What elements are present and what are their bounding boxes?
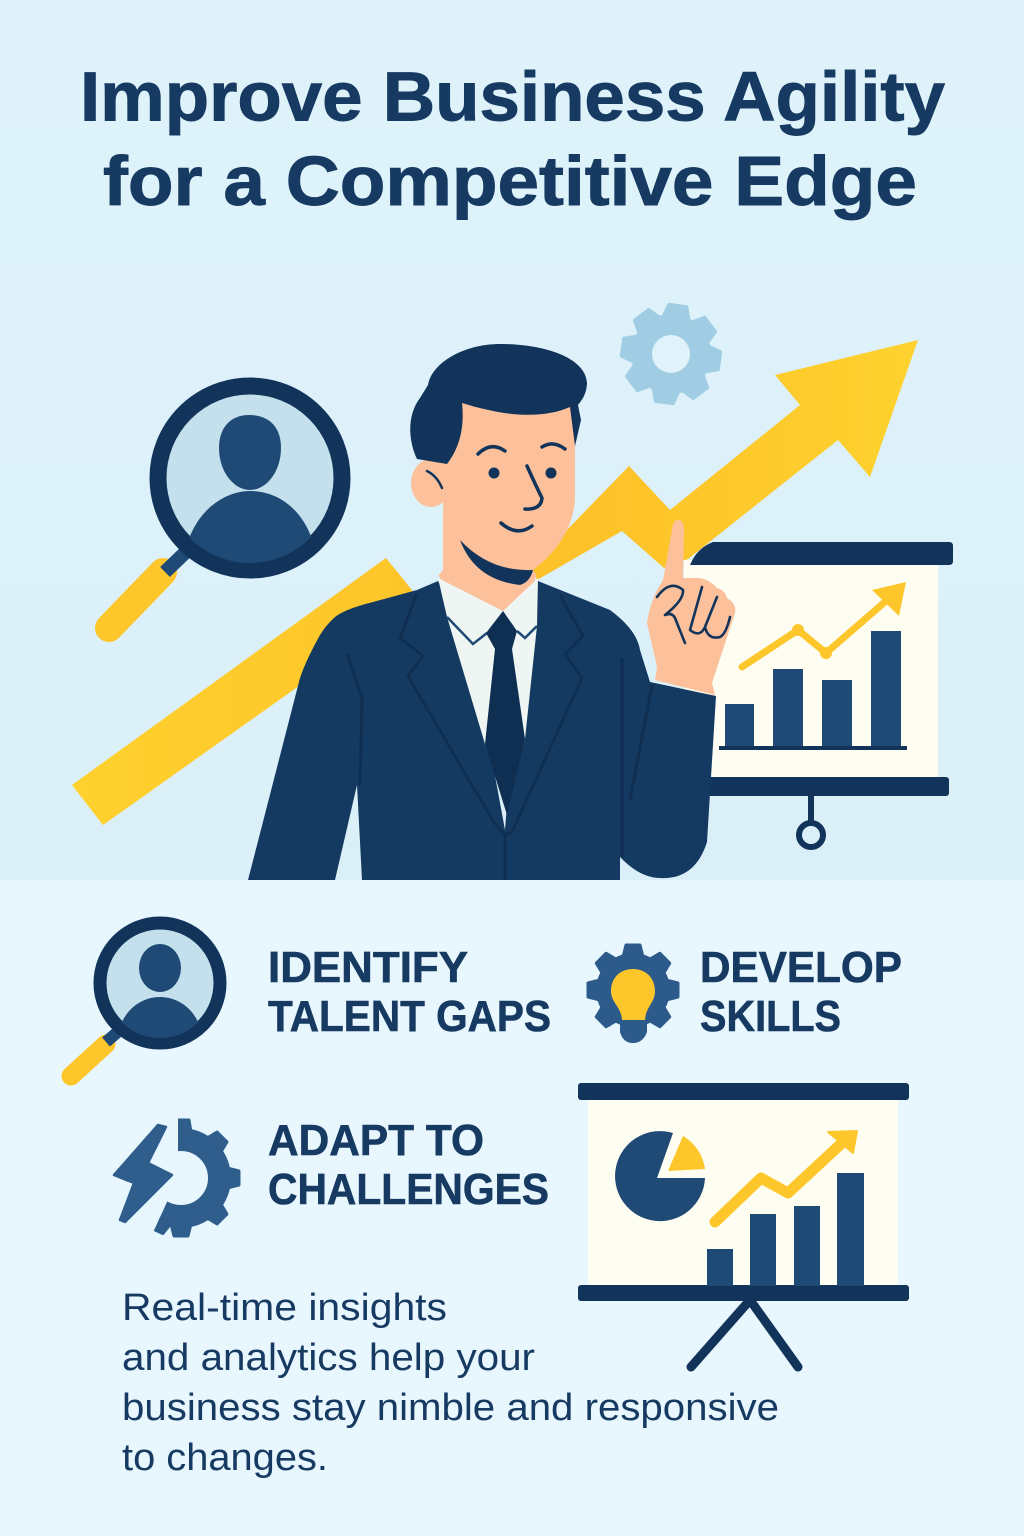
title: for a Competitive Edge bbox=[103, 142, 917, 220]
icon: gear with light bulb bbox=[588, 945, 678, 1043]
neck and face bbox=[438, 400, 575, 615]
label: IDENTIFY bbox=[268, 943, 468, 992]
neck skin over collar bbox=[438, 570, 537, 611]
body text: business stay nimble and responsive bbox=[122, 1387, 779, 1429]
label: DEVELOP bbox=[700, 943, 902, 992]
body text: to changes. bbox=[122, 1437, 328, 1479]
lower panel background bbox=[0, 880, 1024, 1536]
growth arrow bbox=[72, 340, 918, 825]
label: CHALLENGES bbox=[268, 1165, 549, 1214]
neck shadow bbox=[460, 540, 533, 585]
label bbox=[268, 1116, 549, 1214]
presentation board with bar chart bbox=[684, 542, 953, 847]
icon: magnifying glass bbox=[71, 923, 220, 1076]
label: SKILLS bbox=[700, 992, 841, 1041]
icon: large magnifying glass with person bbox=[109, 386, 342, 628]
body text bbox=[122, 1287, 779, 1479]
feature: identify talent gaps bbox=[71, 923, 551, 1076]
title bbox=[80, 58, 945, 220]
collar edge bbox=[447, 617, 537, 644]
man presenter bbox=[248, 344, 735, 880]
title: Improve Business Agility bbox=[80, 58, 945, 136]
tie bbox=[485, 611, 525, 815]
hero background bbox=[0, 0, 1024, 880]
ear bbox=[411, 459, 451, 507]
feature: adapt to challenges bbox=[114, 1116, 549, 1236]
shirt bbox=[438, 578, 538, 810]
brows and eyes bbox=[478, 444, 565, 531]
label: TALENT GAPS bbox=[268, 992, 551, 1041]
presentation board with pie and bars bbox=[578, 1083, 909, 1367]
body text: Real-time insights bbox=[122, 1287, 447, 1329]
body text: and analytics help your bbox=[122, 1337, 535, 1379]
icon: light blue gear bbox=[621, 304, 721, 404]
hand with raised finger bbox=[647, 520, 735, 695]
label bbox=[268, 943, 551, 1041]
hair bbox=[410, 344, 587, 464]
pie chart bbox=[615, 1131, 705, 1221]
ear line bbox=[427, 471, 442, 488]
jacket lines bbox=[347, 593, 652, 880]
icon: lightning bolt and gear bbox=[114, 1120, 239, 1236]
label: ADAPT TO bbox=[268, 1116, 484, 1165]
label bbox=[700, 943, 902, 1041]
jacket bbox=[248, 581, 716, 880]
feature: develop skills bbox=[588, 943, 902, 1043]
